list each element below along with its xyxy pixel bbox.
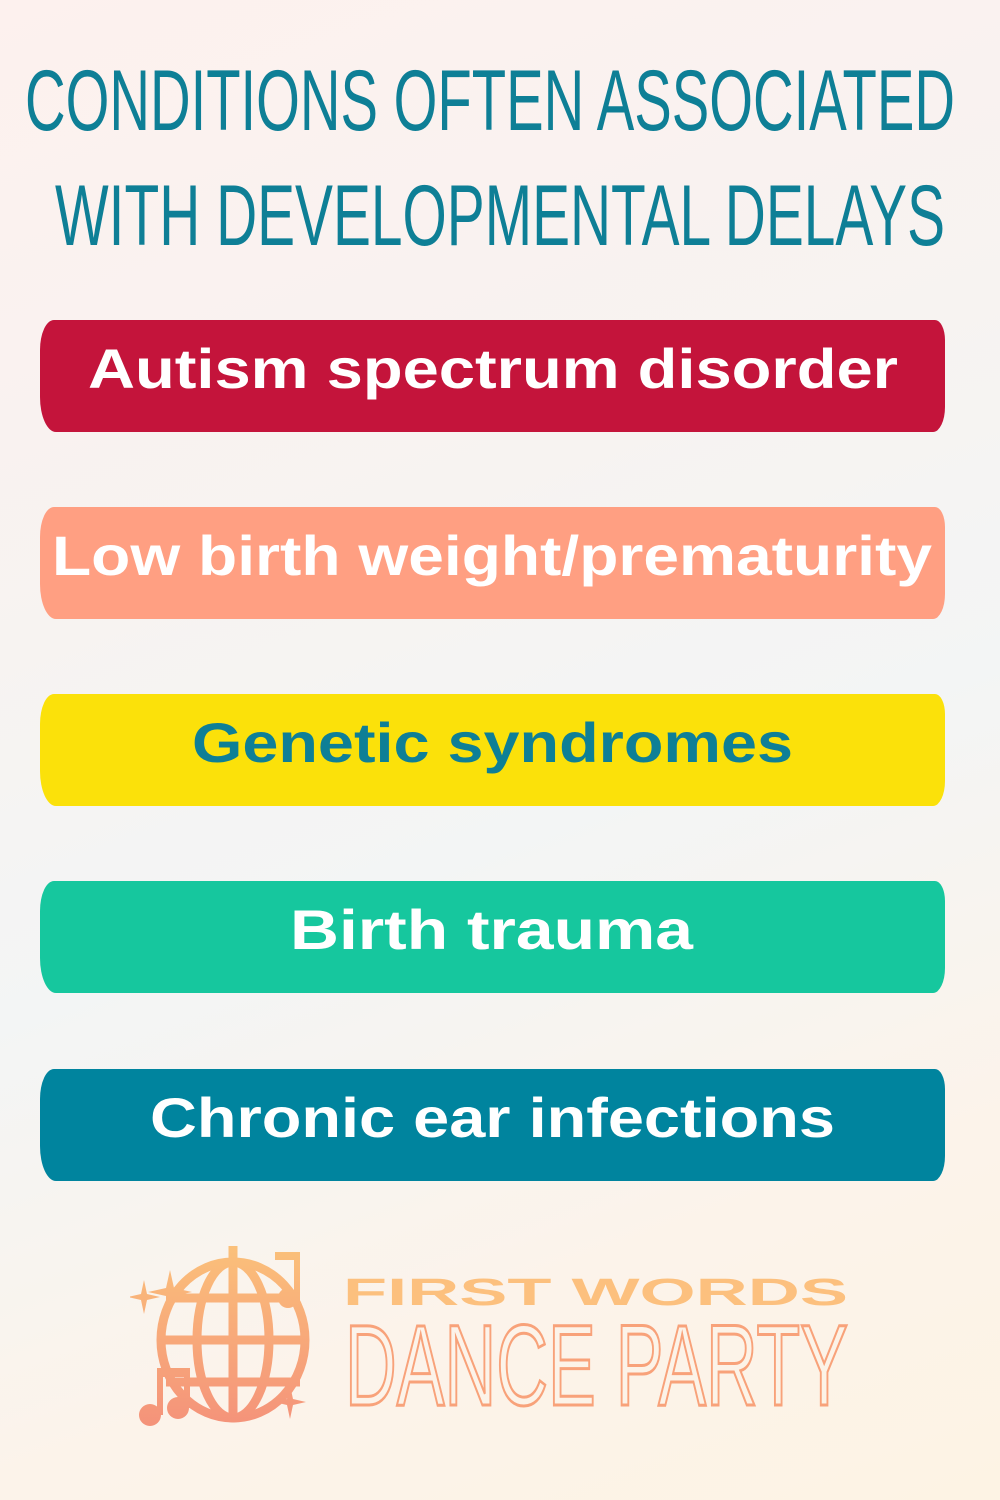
bar: low birth weight: Low birth weight/prematurity: [52, 524, 932, 587]
bar: genetic: [40, 694, 945, 806]
logo: [130, 1246, 848, 1430]
bar: ear infections: Chronic ear infections: [150, 1086, 835, 1149]
text: logo wordmark: FIRST WORDS: [343, 1272, 848, 1314]
bar: autism: [40, 320, 945, 432]
bar: genetic: Genetic syndromes: [192, 711, 793, 774]
bar: autism: Autism spectrum disorder: [88, 337, 898, 400]
bar: ear infections: [40, 1069, 945, 1181]
title: [25, 53, 955, 260]
bar: low birth weight: [40, 507, 945, 619]
bar: birth trauma: Birth trauma: [290, 898, 694, 961]
bar: birth trauma: [40, 881, 945, 993]
icon: disco globe: [130, 1246, 310, 1426]
